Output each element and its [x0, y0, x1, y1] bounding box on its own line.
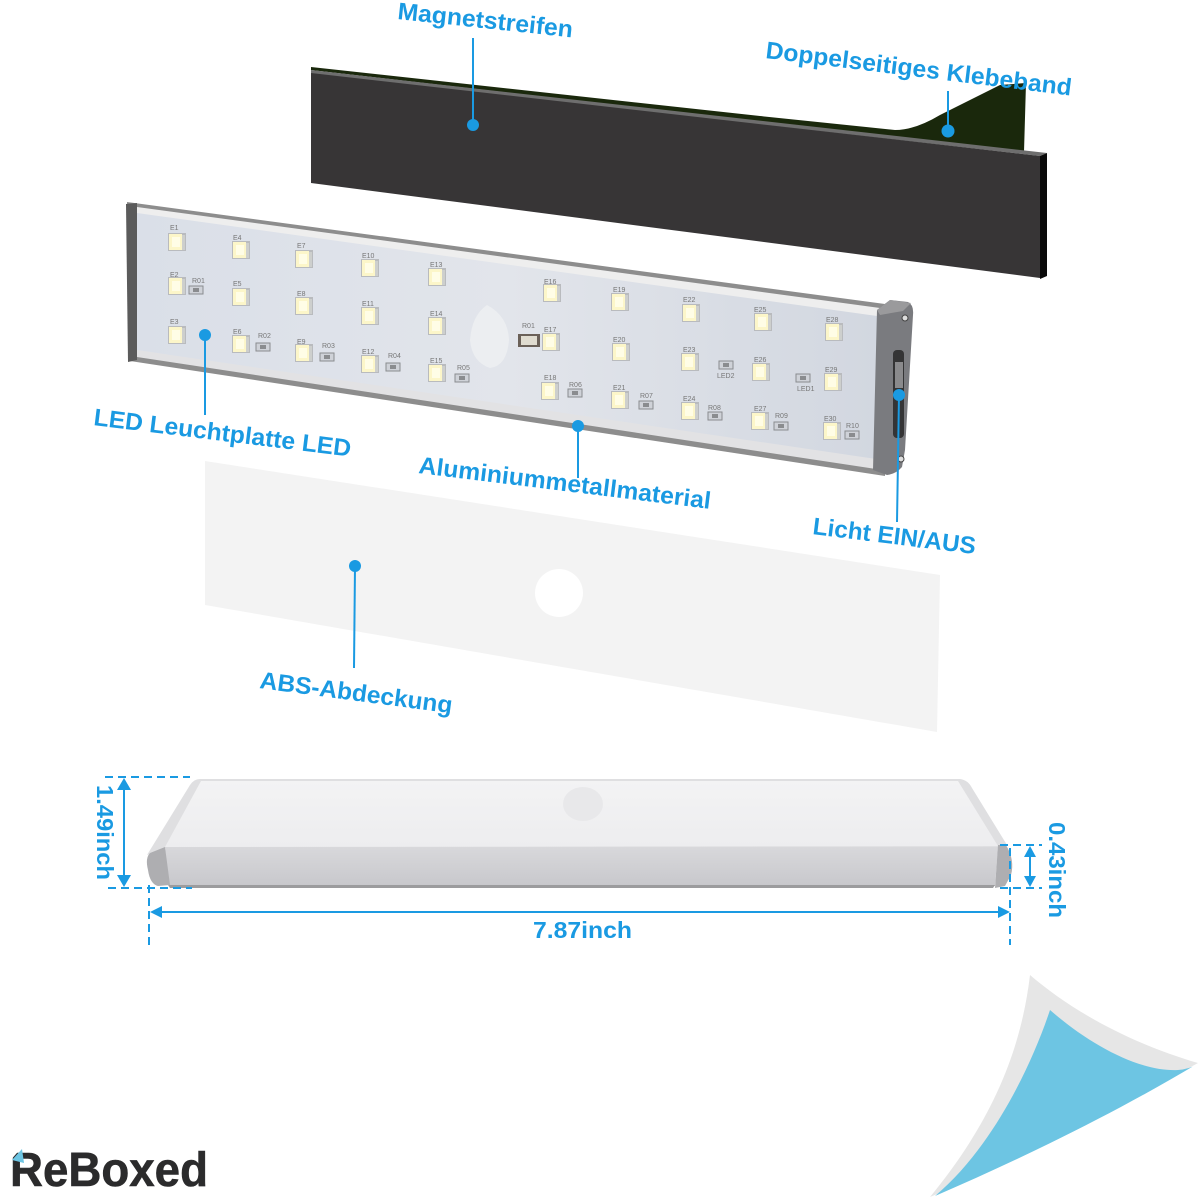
component labels: R03 — [322, 343, 335, 350]
callout: Aluminiummetallmaterial — [417, 420, 712, 515]
LED array — [168, 233, 859, 440]
callout: Doppelseitiges Klebeband: Doppelseitiges Klebeband — [764, 37, 1073, 101]
left end cap — [147, 847, 170, 886]
PIR dome — [563, 787, 603, 821]
front face — [165, 847, 998, 886]
component labels: R10 — [846, 423, 859, 430]
component labels: E23 — [683, 347, 696, 354]
top face — [147, 779, 1007, 855]
component labels: R01 — [192, 278, 205, 285]
component labels: E26 — [754, 357, 767, 364]
sensor chip — [518, 334, 540, 347]
component labels: E15 — [430, 358, 443, 365]
component labels: E12 — [362, 349, 375, 356]
sensor hole — [535, 569, 583, 617]
panel: assembled light bar — [147, 779, 1012, 888]
dimension: height 1.49inch: 1.49inch — [92, 785, 118, 880]
component labels: E10 — [362, 253, 375, 260]
magnetic strip — [311, 70, 1047, 279]
component labels: E6 — [233, 329, 242, 336]
callout: Licht EIN/AUS — [811, 389, 977, 560]
component labels: E28 — [826, 317, 839, 324]
component labels: R08 — [708, 405, 721, 412]
component labels: R09 — [775, 413, 788, 420]
component labels: LED1 — [797, 386, 815, 393]
right end cap — [995, 845, 1012, 888]
component labels: E1 — [170, 225, 179, 232]
callout: Magnetstreifen — [396, 0, 574, 131]
callout: Aluminiummetallmaterial: Aluminiummetallmaterial — [417, 452, 712, 515]
aluminium housing — [127, 202, 885, 476]
component labels: E27 — [754, 406, 767, 413]
component labels: E13 — [430, 262, 443, 269]
component labels — [170, 225, 859, 430]
dimension: width 7.87inch — [149, 848, 1010, 950]
panel: LED light board — [126, 202, 913, 476]
component labels: E4 — [233, 235, 242, 242]
component labels: E29 — [825, 367, 838, 374]
component labels: E16 — [544, 279, 557, 286]
component labels: LED2 — [717, 373, 735, 380]
component labels: E17 — [544, 327, 557, 334]
component labels: E8 — [297, 291, 306, 298]
callout: Doppelseitiges Klebeband — [764, 37, 1073, 138]
panel: magnetic strip with double-sided tape — [311, 67, 1047, 279]
page curl decoration — [930, 975, 1198, 1197]
dimension: width 7.87inch: 7.87inch — [533, 917, 632, 943]
PIR motion sensor — [470, 305, 509, 368]
left end cap — [126, 203, 137, 362]
component labels: E25 — [754, 307, 767, 314]
component labels: E22 — [683, 297, 696, 304]
component labels: E19 — [613, 287, 626, 294]
panel: ABS cover — [205, 461, 940, 732]
power switch — [893, 350, 904, 438]
logo: ReBoxed: ReBoxed — [10, 1144, 208, 1197]
component labels: E3 — [170, 319, 179, 326]
component labels: R07 — [640, 393, 653, 400]
component labels: E11 — [362, 301, 374, 308]
dimension: height 1.49inch — [92, 777, 192, 888]
component labels: E14 — [430, 311, 443, 318]
double-sided tape — [311, 67, 1026, 152]
right end cap — [873, 300, 913, 475]
component labels: E18 — [544, 375, 557, 382]
component labels: R04 — [388, 353, 401, 360]
component labels: E30 — [824, 416, 837, 423]
component labels: E21 — [613, 385, 626, 392]
callout: ABS-Abdeckung: ABS-Abdeckung — [258, 667, 454, 719]
component labels: E24 — [683, 396, 696, 403]
callout: LED Leuchtplatte LED: LED Leuchtplatte LED — [92, 404, 353, 463]
component labels: R05 — [457, 365, 470, 372]
callout: LED Leuchtplatte LED — [92, 329, 353, 463]
dimension: depth 0.43inch: 0.43inch — [1044, 822, 1070, 918]
component labels: E5 — [233, 281, 242, 288]
component labels: R02 — [258, 333, 271, 340]
component labels: E20 — [613, 337, 626, 344]
dimension: depth 0.43inch — [1000, 822, 1070, 918]
callout: ABS-Abdeckung — [258, 560, 454, 719]
component labels: R01 — [522, 323, 535, 330]
component labels: R06 — [569, 382, 582, 389]
component labels: E2 — [170, 272, 179, 279]
component labels: E7 — [297, 243, 306, 250]
component labels: E9 — [297, 339, 306, 346]
callout: Licht EIN/AUS: Licht EIN/AUS — [811, 513, 977, 560]
circuit board — [137, 213, 877, 459]
